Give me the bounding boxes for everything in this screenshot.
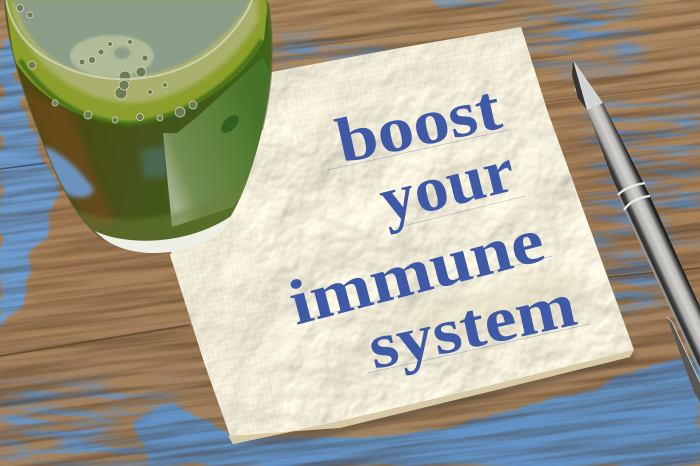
pale foam band: [10, 0, 258, 103]
glass rim: [6, 0, 252, 79]
glass right edge: [262, 0, 272, 130]
juice surface: [14, 0, 250, 76]
bottom glass tint: [78, 186, 246, 241]
word: your: your: [372, 134, 521, 236]
green foam ring: [5, 0, 268, 124]
word: immune: immune: [282, 204, 551, 339]
napkin reflection in glass: [163, 57, 273, 227]
liquid body: [0, 0, 290, 245]
pen barrel: [587, 103, 700, 373]
blue table reflection: [42, 146, 94, 198]
shadow under napkin: [232, 352, 636, 446]
word: boost: boost: [330, 71, 508, 177]
word: system: system: [362, 268, 582, 383]
pen: [572, 60, 700, 402]
glass of green juice: [0, 0, 290, 253]
napkin: [165, 25, 640, 450]
napkin lower folded edge: [228, 350, 634, 444]
glass left edge: [5, 0, 102, 238]
hand-lettered text: boost your immune system: [282, 71, 590, 383]
pen tip: [573, 60, 603, 110]
bubbles: [16, 4, 197, 123]
pen clip: [667, 317, 700, 402]
pen rings: [618, 183, 650, 210]
bubble hole in reflection: [221, 115, 239, 133]
brown wood refraction: [26, 92, 114, 228]
glass base: [95, 214, 234, 253]
foam bubble cluster: [70, 35, 154, 77]
